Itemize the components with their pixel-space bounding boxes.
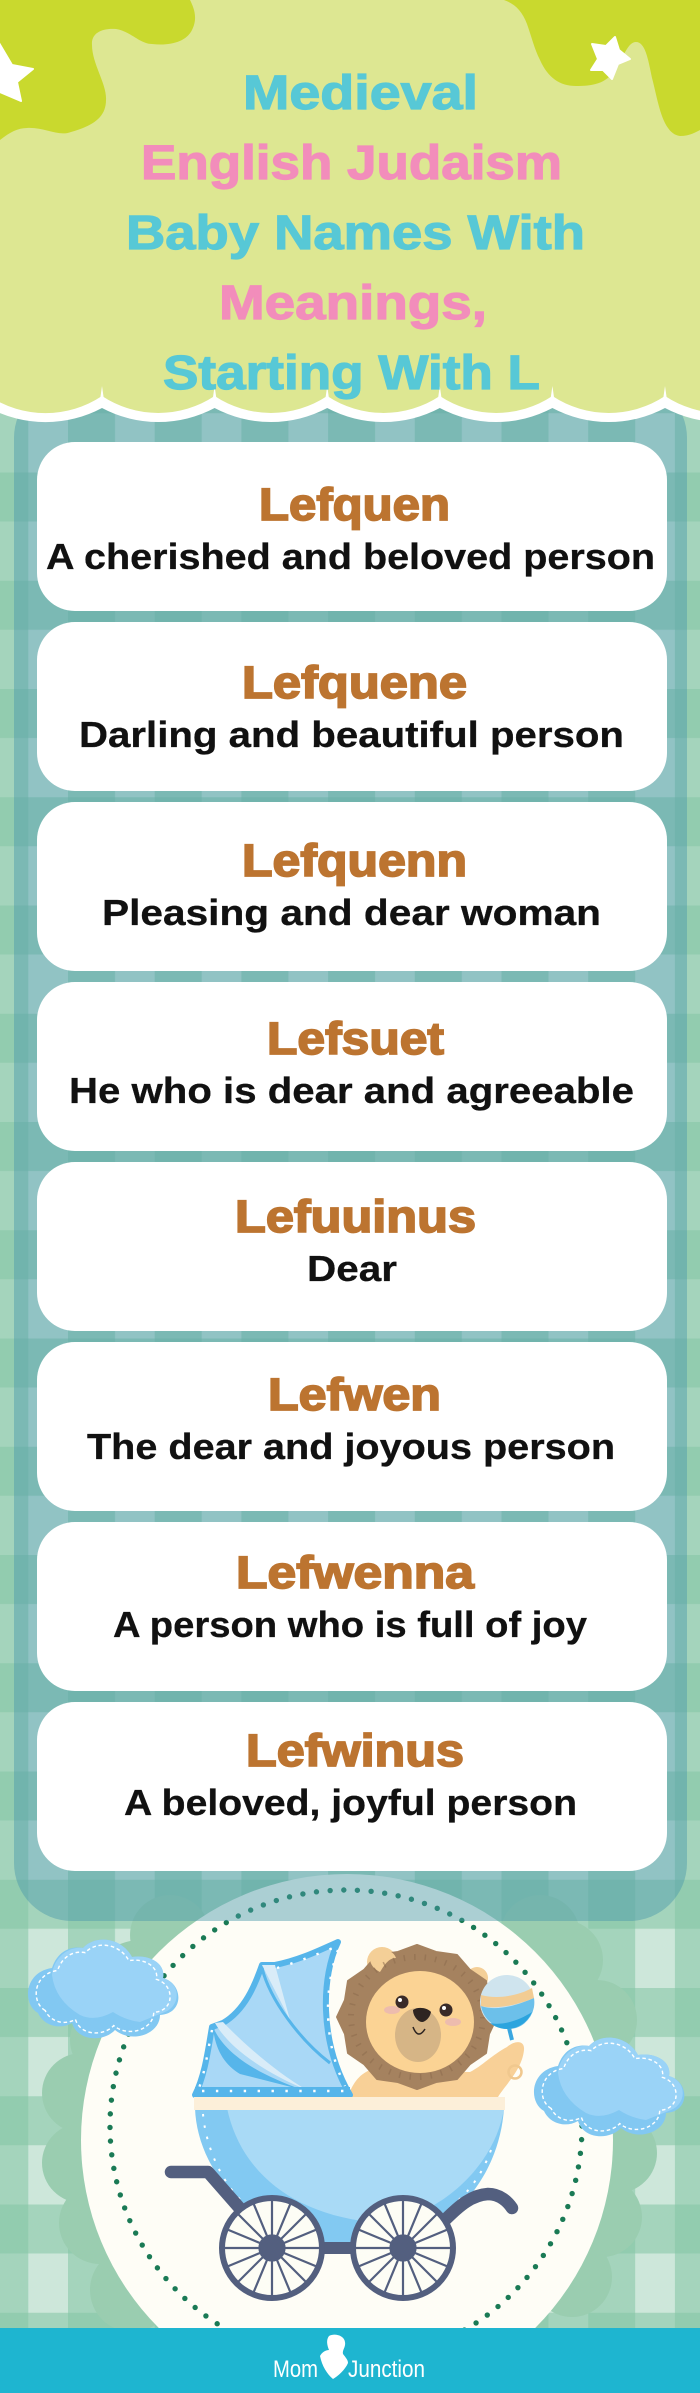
- card: Lefquene: Lefquene: [242, 657, 467, 708]
- logo wordmark: Mom: [273, 2356, 318, 2383]
- card: Lefwen: Lefwen: [268, 1369, 441, 1420]
- title: Starting With L: [163, 347, 540, 400]
- hood: [195, 1942, 350, 2096]
- wheel right: [353, 2198, 453, 2298]
- card: Lefsuet: He who is dear and agreeable: [69, 1070, 634, 1111]
- lion face: [366, 1971, 474, 2073]
- title: Meanings,: [219, 277, 487, 330]
- footer band: [0, 2328, 700, 2393]
- card: Lefquene: Darling and beautiful person: [79, 714, 624, 755]
- white medallion circle: [81, 1874, 613, 2328]
- card: Lefsuet: Lefsuet: [267, 1013, 444, 1064]
- icon: stroller with lion: [171, 1942, 534, 2298]
- lion body: [348, 2042, 524, 2097]
- title: English Judaism: [141, 137, 562, 190]
- card: Lefwenna: [37, 1522, 667, 1691]
- card: Lefwinus: A beloved, joyful person: [124, 1782, 577, 1823]
- card: Lefquenn: Lefquenn: [242, 835, 467, 886]
- card: Lefquen: Lefquen: [259, 479, 450, 530]
- icon: left cloud: [28, 1940, 178, 2038]
- dotted ring: [110, 1890, 582, 2362]
- wheel left: [222, 2198, 322, 2298]
- lion blush: [384, 2006, 400, 2014]
- star right: [591, 37, 630, 79]
- card: Lefwenna: Lefwenna: [236, 1547, 475, 1598]
- card: Lefquene: [37, 622, 667, 791]
- scalloped white edge: [0, 380, 700, 422]
- lion eyes: [396, 1996, 408, 2008]
- card: Lefquenn: [37, 802, 667, 971]
- title: [126, 67, 585, 400]
- lion mane: [337, 1945, 497, 2089]
- logo figure: [320, 2335, 348, 2379]
- scallop cusp tips: [100, 386, 667, 400]
- card: Lefuuinus: Lefuuinus: [235, 1191, 476, 1242]
- stroller handle and springs: [171, 2172, 243, 2212]
- card: Lefuuinus: [37, 1162, 667, 1331]
- card: Lefwen: The dear and joyous person: [87, 1426, 615, 1467]
- card: Lefwenna: A person who is full of joy: [113, 1604, 587, 1645]
- card: Lefquen: A cherished and beloved person: [46, 536, 655, 577]
- scalloped backdrop around circle: [42, 1895, 657, 2332]
- title: Baby Names With: [126, 207, 585, 260]
- lion ear fronts: [370, 1950, 396, 1972]
- star left: [0, 38, 33, 101]
- card: Lefwinus: Lefwinus: [246, 1725, 464, 1776]
- scallop lobes: [0, 370, 700, 413]
- title: Medieval: [243, 67, 478, 120]
- translucent teal panel: [14, 380, 687, 1921]
- lion hand ring: [508, 2066, 522, 2078]
- basket stitching: [203, 2114, 491, 2215]
- header: [0, 0, 700, 422]
- mane fur texture: [351, 1957, 483, 2077]
- basket lace: [194, 2097, 505, 2110]
- lion muzzle: [395, 2008, 441, 2062]
- header pale blob: [0, 0, 700, 396]
- lion mouth: [413, 2027, 425, 2034]
- axle: [272, 2242, 403, 2254]
- icon: right cloud: [534, 2038, 684, 2136]
- card: Lefquen: [37, 442, 667, 611]
- logo: MomJunction: [273, 2335, 425, 2383]
- basket: [195, 2108, 504, 2245]
- header lime background: [0, 0, 700, 150]
- card: Lefwinus: [37, 1702, 667, 1871]
- logo: MomJunction: Junction: [348, 2356, 425, 2383]
- card: Lefsuet: [37, 982, 667, 1151]
- lion ears: [367, 1947, 397, 1977]
- lion nose: [413, 2008, 431, 2022]
- card: Lefquenn: Pleasing and dear woman: [102, 892, 601, 933]
- card: Lefuuinus: Dear: [307, 1248, 397, 1289]
- card: Lefwen: [37, 1342, 667, 1511]
- rattle: [480, 1975, 534, 2040]
